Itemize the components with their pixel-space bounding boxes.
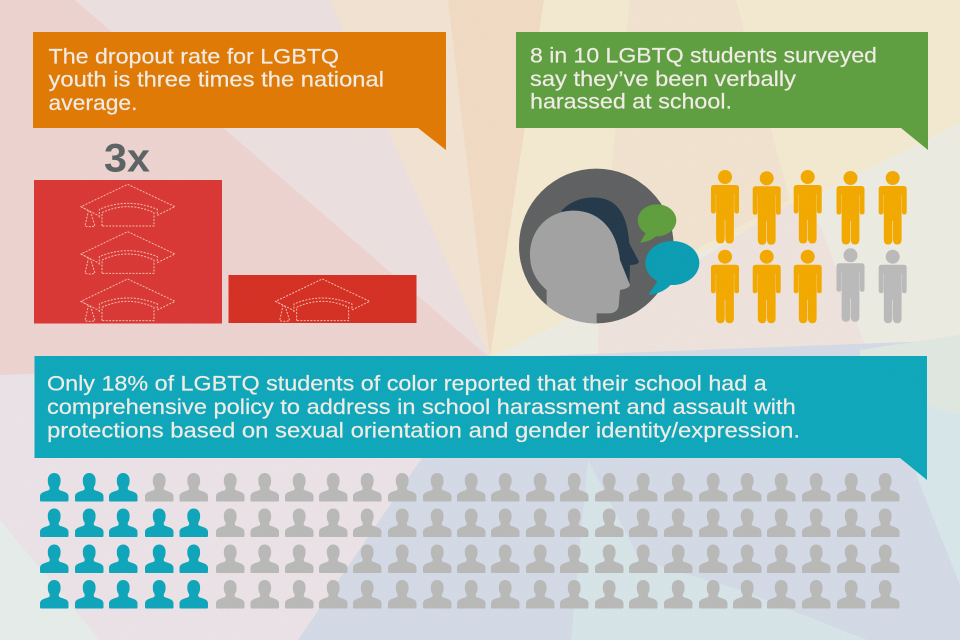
- panel: dropout rate callout: [33, 32, 446, 150]
- people: other students: [836, 248, 907, 323]
- pictogram: 18 percent of students: [40, 473, 900, 608]
- bar: LGBTQ dropout rate with three caps: [34, 180, 222, 324]
- icon: graduation cap: [276, 279, 370, 321]
- heading: school policy text: Only 18% of LGBTQ students of color reported that their school had a: [47, 372, 767, 396]
- heading: school policy text: [47, 372, 800, 442]
- people row 1: [40, 473, 900, 502]
- panel: verbal harassment callout: [516, 32, 928, 150]
- heading: verbal harassment text: 8 in 10 LGBTQ students surveyed: [530, 44, 877, 68]
- heading: dropout rate text: [48, 44, 384, 115]
- heading: school policy text: protections based on sexual orientation and gender identity/expression.: [47, 418, 800, 442]
- heading: dropout rate text: average.: [48, 91, 138, 115]
- icon: heads with speech bubbles: [519, 169, 699, 325]
- heading: verbal harassment text: say they’ve been verbally: [530, 67, 796, 91]
- panel: school policy callout: [34, 356, 927, 480]
- bar: national dropout rate with one cap: [228, 275, 416, 323]
- pictogram: 8 of 10 students: [711, 170, 907, 323]
- heading: dropout rate text: youth is three times the national: [48, 68, 384, 92]
- people row 4: [40, 580, 900, 608]
- people: harassed students: [711, 170, 907, 323]
- icon: teal speech bubble: [645, 241, 699, 295]
- heading: dropout rate text: The dropout rate for LGBTQ: [48, 44, 339, 68]
- people row 3: [40, 544, 900, 573]
- icon: green speech bubble: [638, 204, 676, 243]
- heading: verbal harassment text: harassed at school.: [530, 90, 732, 114]
- people row 2: [40, 508, 900, 537]
- label: 3x: 3x: [104, 137, 150, 181]
- icon: graduation caps stack: [81, 184, 175, 321]
- heading: verbal harassment text: [530, 44, 877, 114]
- heading: school policy text: comprehensive policy to address in school harassment and assault with: [47, 395, 796, 419]
